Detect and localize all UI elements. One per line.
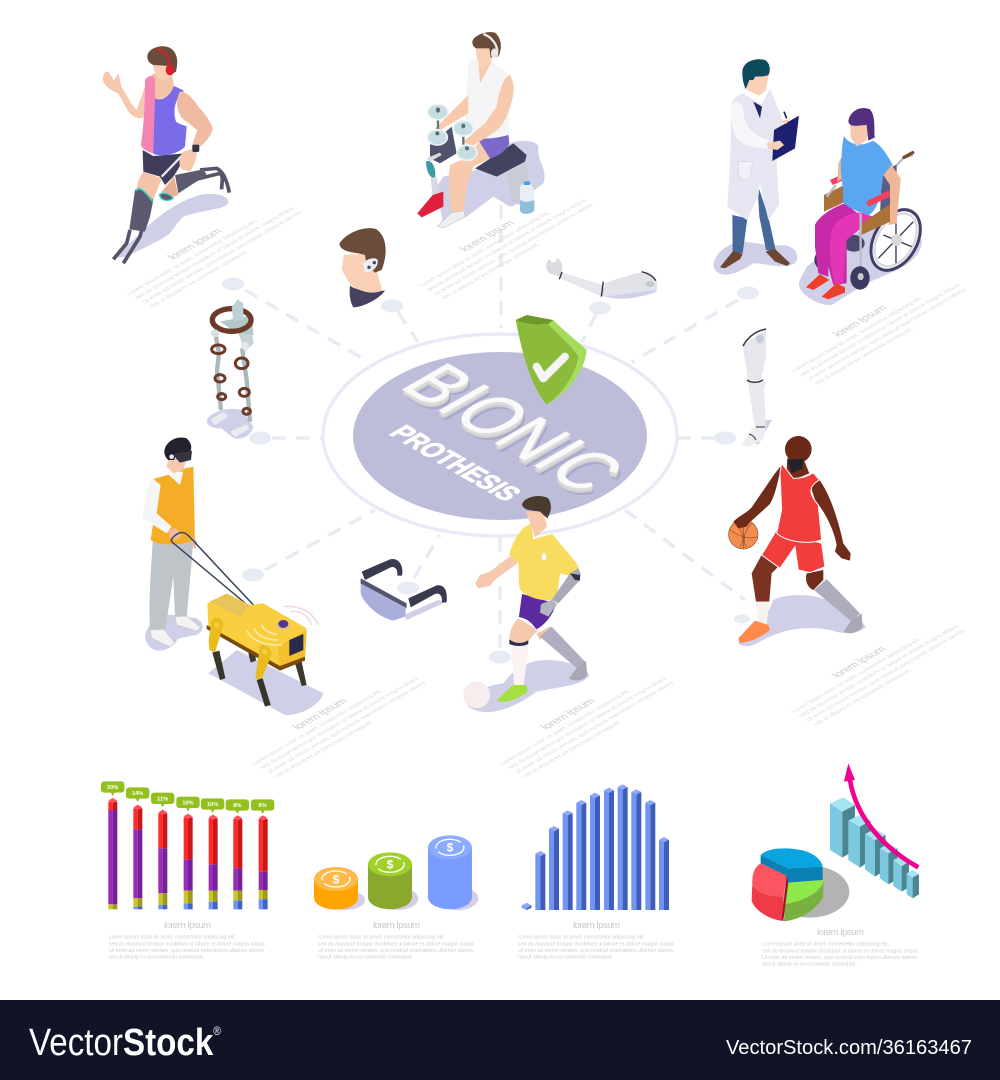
- text block: wheelchair: Ut enim ad minim veniam, quis nostrud exercitation ullamco laboris: [806, 288, 968, 382]
- heading: BIONIC: BIONIC: [383, 358, 642, 508]
- figure: runner with blade prostheses: [103, 46, 229, 263]
- text block: basketball: sed do eiusmod tempor incididunt ut labore et dolore magna aliqua.: [798, 624, 962, 718]
- text block: chart 4: Ut enim ad minim veniam, quis nostrud exercitation ullamco laboris: [762, 955, 917, 961]
- wheelchair patient sub-figure: [799, 108, 930, 305]
- robot dog sub-figure: [207, 593, 323, 715]
- heading: BIONIC: BIONIC: [385, 360, 644, 510]
- figure: doctor with clipboard: [713, 59, 930, 305]
- text block: chart 3: lorem Ipsum: [573, 920, 620, 931]
- text block: chart 1: sed do eiusmod tempor incididunt ut labore et dolore magna aliqua.: [109, 941, 266, 947]
- text block: chart 4: Lorem ipsum dolor sit amet, consectetur adipiscing elit,: [762, 942, 889, 948]
- text block: robot dog: nisi ut aliquip ex ea commodo consequat.: [274, 720, 375, 779]
- text block: soccer: [487, 664, 686, 779]
- footer id: VectorStock.com/36163467: [726, 1037, 972, 1059]
- text block: chart 3: sed do eiusmod tempor incididunt ut labore et dolore magna aliqua.: [518, 941, 675, 947]
- subheading: PROTHESIS: PROTHESIS: [382, 421, 527, 506]
- text block: dumbbell man: sed do eiusmod tempor incididunt ut labore et dolore magna aliqua.: [426, 198, 590, 292]
- text block: dumbbell man: Ut enim ad minim veniam, quis nostrud exercitation ullamco laboris: [433, 203, 595, 297]
- footer logo: ®: [213, 1024, 221, 1038]
- footer logo: VectorStock: [29, 1022, 226, 1064]
- text block: chart 2: [318, 920, 475, 961]
- chart: stacked percent bars: 10%: [207, 802, 218, 808]
- text block: robot dog: lorem Ipsum: [291, 697, 350, 732]
- text block: basketball: nisi ut aliquip ex ea commodo consequat.: [813, 668, 914, 727]
- chart: blue isometric bars: [522, 784, 669, 910]
- text block: robot dog: Lorem ipsum dolor sit amet, consectetur adipiscing elit,: [252, 689, 385, 766]
- text block: chart 2: lorem Ipsum: [373, 920, 420, 931]
- icon: green check shield: [516, 315, 587, 404]
- text block: chart 1: Ut enim ad minim veniam, quis nostrud exercitation ullamco laboris: [109, 948, 264, 954]
- text block: wheelchair: sed do eiusmod tempor incididunt ut labore et dolore magna aliqua.: [799, 283, 963, 377]
- text block: dumbbell man: [406, 186, 605, 301]
- text block: runner: lorem Ipsum: [166, 227, 225, 262]
- text block: dumbbell man: lorem Ipsum: [458, 219, 517, 254]
- central hub: Bionic Prothesis: [323, 334, 677, 536]
- chart: stacked percent bars: 20%: [107, 785, 118, 791]
- text block: robot dog: Ut enim ad minim veniam, quis nostrud exercitation ullamco laboris: [266, 681, 428, 775]
- text block: soccer: nisi ut aliquip ex ea commodo consequat.: [522, 720, 623, 779]
- chart: stacked percent bars: 8%: [259, 803, 267, 809]
- text block: chart 1: Lorem ipsum dolor sit amet, consectetur adipiscing elit,: [109, 934, 236, 940]
- text block: basketball: lorem Ipsum: [830, 645, 889, 680]
- text block: chart 1: nisi ut aliquip ex ea commodo consequat.: [109, 955, 204, 961]
- text block: chart 1: [109, 920, 266, 961]
- text block: chart 4: nisi ut aliquip ex ea commodo consequat.: [762, 962, 857, 968]
- text block: soccer: Lorem ipsum dolor sit amet, consectetur adipiscing elit,: [500, 689, 633, 766]
- chart: stacked percent bars: [101, 781, 274, 909]
- chart: stacked percent bars: 8%: [233, 803, 241, 809]
- text block: wheelchair: lorem Ipsum: [831, 304, 890, 339]
- chart: dollar cylinders: [314, 835, 478, 910]
- chart: 3D pie with falling bars and arrow: [752, 763, 919, 921]
- figure: seated man lifting dumbbells: [417, 32, 545, 228]
- text block: chart 4: [762, 927, 919, 968]
- figure: man with robot guide dog: [143, 437, 323, 715]
- text block: chart 2: Lorem ipsum dolor sit amet, consectetur adipiscing elit,: [318, 934, 445, 940]
- icon: smart glasses: [361, 559, 447, 621]
- text block: chart 3: Lorem ipsum dolor sit amet, consectetur adipiscing elit,: [518, 934, 645, 940]
- text block: wheelchair: nisi ut aliquip ex ea commodo consequat.: [814, 327, 915, 386]
- text block: chart 2: sed do eiusmod tempor incididunt ut labore et dolore magna aliqua.: [318, 941, 475, 947]
- text block: chart 2: Ut enim ad minim veniam, quis nostrud exercitation ullamco laboris: [318, 948, 473, 954]
- text block: wheelchair: [779, 271, 978, 386]
- icon: head with hearing implant: [339, 228, 386, 307]
- chart: stacked percent bars: 10%: [182, 800, 194, 806]
- heading: BIONIC: BIONIC: [383, 353, 642, 503]
- text block: chart 3: [518, 920, 675, 961]
- chart: stacked percent bars: 11%: [157, 796, 168, 802]
- text block: chart 3: Ut enim ad minim veniam, quis nostrud exercitation ullamco laboris: [518, 948, 673, 954]
- icon: prosthetic arm: [546, 257, 657, 299]
- chart: dollar cylinders: $: [447, 841, 454, 855]
- footer bar: [0, 1000, 1000, 1080]
- text block: chart 1: lorem Ipsum: [164, 920, 211, 931]
- chart: dollar cylinders: $: [387, 858, 394, 872]
- text block: runner: Lorem ipsum dolor sit amet, consectetur adipiscing elit,: [127, 219, 260, 296]
- icon: prosthetic leg: [742, 329, 772, 447]
- text block: chart 3: nisi ut aliquip ex ea commodo consequat.: [518, 955, 613, 961]
- text block: dumbbell man: Lorem ipsum dolor sit amet, consectetur adipiscing elit,: [419, 211, 552, 288]
- text block: chart 2: nisi ut aliquip ex ea commodo consequat.: [318, 955, 413, 961]
- heading: BIONIC: BIONIC: [383, 356, 642, 506]
- text block: soccer: sed do eiusmod tempor incididunt ut labore et dolore magna aliqua.: [507, 676, 671, 770]
- text block: runner: Ut enim ad minim veniam, quis nostrud exercitation ullamco laboris: [141, 211, 303, 305]
- text block: basketball: Ut enim ad minim veniam, quis nostrud exercitation ullamco laboris: [805, 629, 967, 723]
- icon: exoskeleton legs: [207, 299, 254, 439]
- text block: chart 4: lorem Ipsum: [817, 927, 864, 938]
- text block: wheelchair: Lorem ipsum dolor sit amet, consectetur adipiscing elit,: [792, 296, 925, 373]
- text block: soccer: lorem Ipsum: [539, 697, 598, 732]
- text block: basketball: Lorem ipsum dolor sit amet, consectetur adipiscing elit,: [791, 637, 924, 714]
- text block: soccer: Ut enim ad minim veniam, quis nostrud exercitation ullamco laboris: [514, 681, 676, 775]
- chart: dollar cylinders: $: [333, 872, 340, 886]
- text block: runner: nisi ut aliquip ex ea commodo consequat.: [149, 250, 250, 309]
- text block: basketball: [778, 612, 977, 727]
- text block: robot dog: [239, 664, 438, 779]
- text block: robot dog: sed do eiusmod tempor incididunt ut labore et dolore magna aliqua.: [259, 676, 423, 770]
- figure: soccer player with prosthetic arm and leg: [463, 496, 589, 712]
- text block: dumbbell man: nisi ut aliquip ex ea commodo consequat.: [441, 242, 542, 301]
- figure: basketball player with prosthetic leg: [729, 436, 866, 646]
- text block: runner: sed do eiusmod tempor incididunt ut labore et dolore magna aliqua.: [134, 206, 298, 300]
- chart: stacked percent bars: 14%: [132, 791, 143, 797]
- text block: runner: [114, 194, 313, 309]
- text block: chart 4: sed do eiusmod tempor incididunt ut labore et dolore magna aliqua.: [762, 948, 919, 954]
